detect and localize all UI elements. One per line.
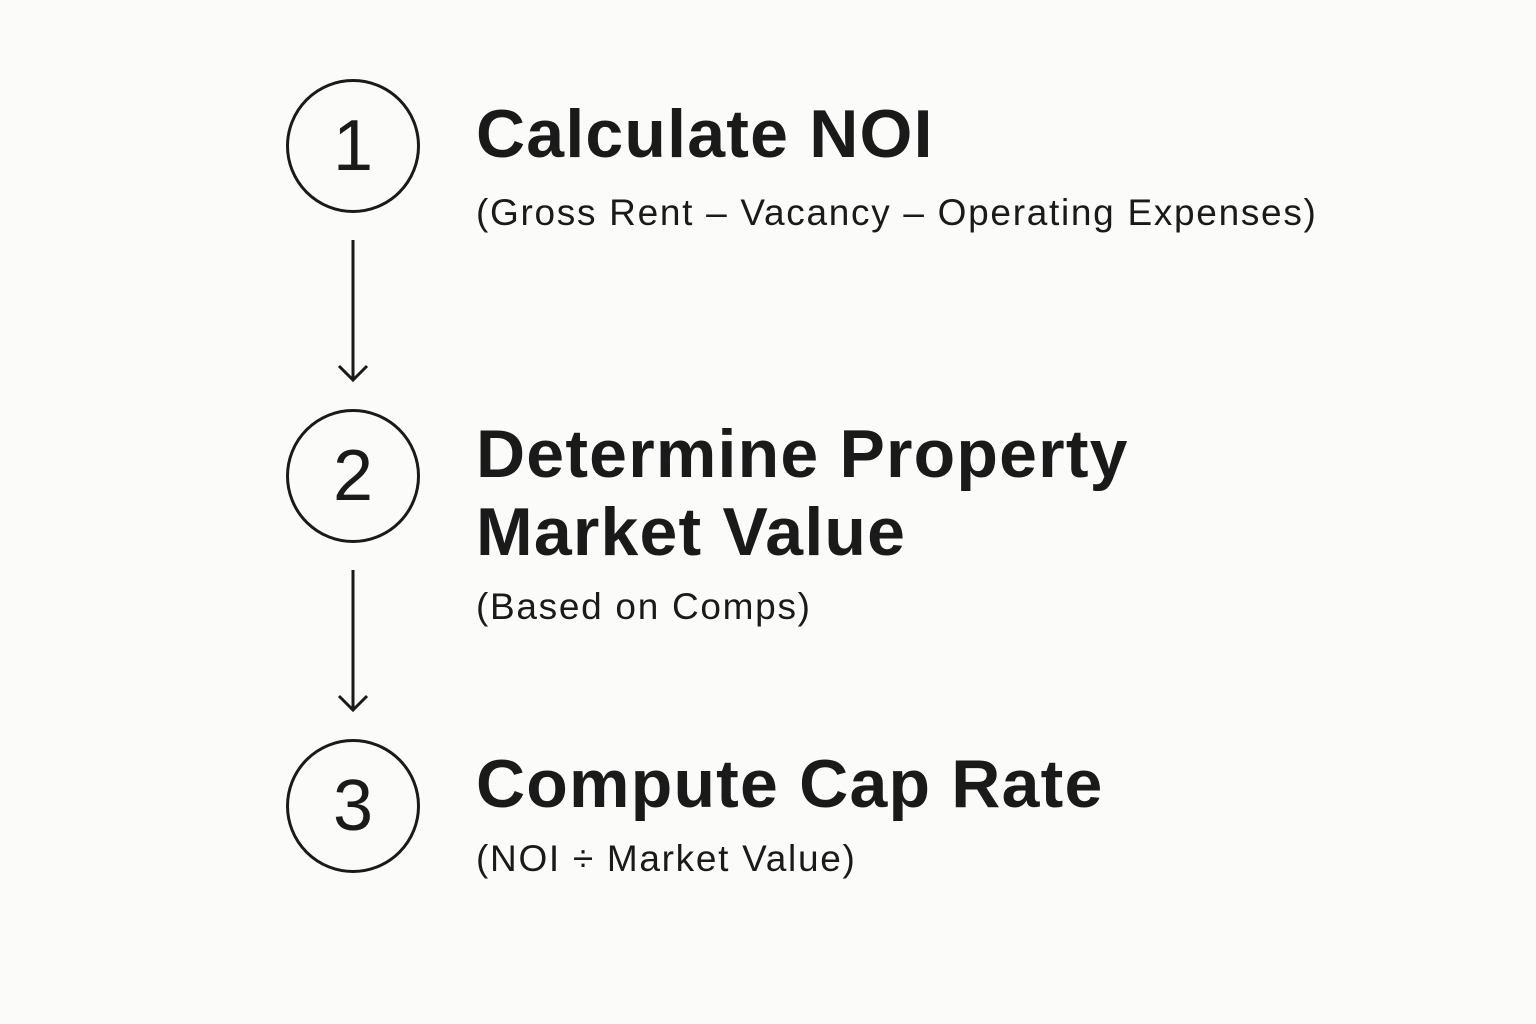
step 2 heading: Determine Property <box>476 416 1129 492</box>
step 3 heading: Compute Cap Rate <box>476 746 1103 822</box>
step 3 number circle <box>286 739 420 873</box>
step 3 subtext: (NOI ÷ Market Value) <box>476 838 857 879</box>
step 2 number circle <box>286 409 420 543</box>
step 2 heading <box>476 416 1129 570</box>
step 1 number circle <box>286 79 420 213</box>
step 1 number circle: 1 <box>333 106 373 186</box>
step 3 number circle: 3 <box>333 766 373 846</box>
step 2 number circle: 2 <box>333 436 373 516</box>
step 1 heading: Calculate NOI <box>476 96 934 172</box>
step 1 subtext: (Gross Rent – Vacancy – Operating Expenses) <box>476 192 1318 233</box>
arrow 1 to 2 <box>338 240 368 382</box>
arrow 2 to 3 <box>338 570 368 712</box>
step 2 subtext: (Based on Comps) <box>476 586 812 627</box>
step 2 heading: Market Value <box>476 494 906 570</box>
